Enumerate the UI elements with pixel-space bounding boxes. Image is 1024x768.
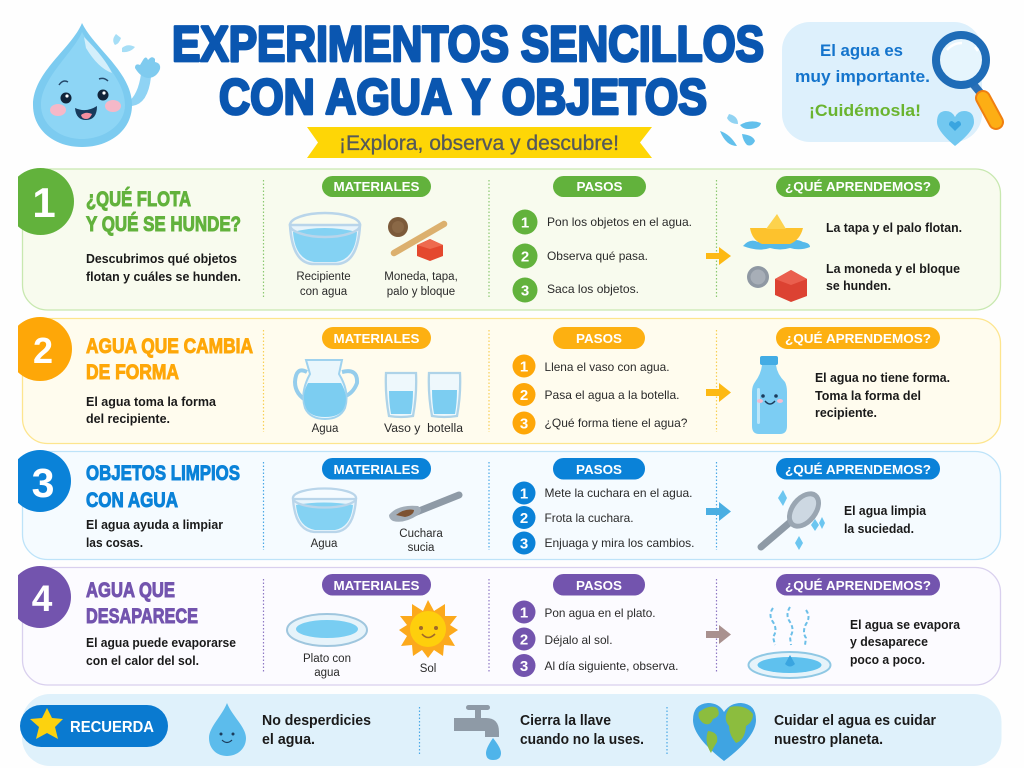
panel 4 steps: 3	[520, 658, 528, 675]
icon: blue heart	[937, 111, 974, 146]
icon: plate with water	[287, 614, 367, 646]
panel 2 steps: ¿Qué forma tiene el agua?	[544, 416, 688, 430]
panel 4 pasos pill: PASOS	[576, 578, 622, 593]
panel 1 description: Descubrimos qué objetos	[86, 251, 237, 266]
panel 1 result text: La moneda y el bloque	[826, 261, 960, 276]
callout: el agua es importante	[782, 22, 982, 142]
panel 1 description	[86, 251, 241, 284]
material labels: Agua	[312, 423, 339, 435]
recuerda badge: RECUERDA	[70, 719, 154, 736]
icon: bowl with water	[290, 213, 360, 264]
recuerda badge	[20, 705, 168, 747]
panel 3 background	[22, 452, 1000, 560]
panel 2 result text: recipiente.	[815, 405, 877, 420]
icon: sinking coin and block	[747, 266, 807, 302]
panel 1: qué flota	[7, 168, 1000, 310]
panel 4 result text: poco a poco.	[850, 652, 925, 667]
panel 1 aprendemos pill	[776, 176, 940, 197]
panel 4 description: con el calor del sol.	[86, 653, 199, 668]
material labels: Recipiente	[296, 271, 351, 283]
panel 2 description: El agua toma la forma	[86, 394, 217, 409]
panel 3 aprendemos pill	[776, 458, 940, 480]
panel: recuerda	[20, 694, 1002, 766]
material labels	[296, 271, 458, 298]
panel 4 number badge: 4	[32, 578, 53, 619]
panel 3 steps: 2	[520, 510, 528, 527]
material labels: agua	[314, 667, 340, 679]
material labels: sucia	[408, 542, 435, 554]
panel 2 result text	[815, 370, 950, 420]
panel 2 materiales pill: MATERIALES	[334, 331, 420, 346]
panel 3 result text: El agua limpia	[844, 503, 927, 518]
panel 2 arrow	[706, 383, 731, 402]
icon: glass bowl	[293, 488, 356, 532]
panel 3 arrow	[706, 502, 731, 521]
panel 1 steps: Observa qué pasa.	[547, 249, 648, 263]
mascot: waving water drop	[33, 23, 160, 147]
material labels: Vaso y botella	[384, 423, 464, 435]
panel 2 number badge	[18, 317, 72, 381]
material labels: Cuchara	[399, 528, 443, 540]
material labels	[303, 653, 436, 679]
panel 4 pasos pill	[553, 574, 645, 596]
panel 3 heading: CON AGUA	[86, 488, 178, 512]
panel 4 aprendemos pill	[776, 574, 940, 596]
panel 3 steps	[512, 482, 694, 554]
panel 4 materiales pill: MATERIALES	[334, 578, 420, 593]
panel 1 background	[22, 169, 1000, 310]
material labels: Moneda, tapa,	[384, 271, 458, 283]
panel 2 result text: El agua no tiene forma.	[815, 370, 950, 385]
panel 4: agua que desaparece	[9, 566, 1000, 685]
panel 2 pasos pill	[553, 327, 645, 349]
panel 4 steps: Al día siguiente, observa.	[544, 659, 678, 673]
panel 1 steps: 2	[521, 248, 529, 266]
panel 2 steps: Llena el vaso con agua.	[544, 360, 670, 374]
panel 1 materiales pill	[322, 176, 431, 197]
panel 2 aprendemos pill	[776, 327, 940, 349]
panel 1 pasos pill: PASOS	[576, 179, 623, 194]
panel 4 heading	[86, 578, 198, 628]
material labels	[311, 528, 443, 554]
panel 1 result text: La tapa y el palo flotan.	[826, 220, 962, 235]
icon: evaporating plate	[748, 607, 830, 678]
panel 3 steps: Mete la cuchara en el agua.	[544, 486, 692, 500]
icon: smiling sun	[399, 600, 458, 658]
panel 3 description: El agua ayuda a limpiar	[86, 517, 223, 532]
panel 2 heading: DE FORMA	[86, 360, 179, 384]
callout: el agua es importante: muy importante.	[795, 67, 930, 86]
panel 4 result text: y desaparece	[850, 634, 928, 649]
panel 4 steps: Pon agua en el plato.	[544, 606, 656, 620]
recuerda text 3: nuestro planeta.	[774, 732, 883, 748]
panel 4 result text: El agua se evapora	[850, 617, 961, 632]
material labels: Plato con	[303, 653, 351, 665]
icon: smiling bottle	[752, 356, 787, 434]
panel 3 heading: OBJETOS LIMPIOS	[86, 461, 240, 485]
material labels: palo y bloque	[387, 286, 455, 298]
panel 1 pasos pill	[553, 176, 646, 197]
icon: coin, stick and block	[388, 217, 444, 261]
panel 4 materiales pill	[322, 574, 431, 596]
title: CON AGUA Y OBJETOS	[219, 69, 707, 125]
recuerda text 3: Cuidar el agua es cuidar	[774, 713, 936, 729]
icon: magnifying glass	[936, 35, 996, 122]
panel 2 heading	[86, 334, 253, 384]
icon: faucet and drop	[454, 705, 501, 760]
panel 1 materiales pill: MATERIALES	[334, 179, 420, 194]
panel 3 aprendemos pill: ¿QUÉ APRENDEMOS?	[785, 462, 931, 477]
callout: el agua es importante: ¡Cuidémosla!	[809, 101, 921, 120]
panel 3 heading	[86, 461, 240, 512]
recuerda text 1	[262, 713, 371, 748]
icon: paper boat	[743, 214, 810, 250]
panel 2 pasos pill: PASOS	[576, 331, 622, 346]
title	[172, 16, 764, 125]
panel 1 heading	[86, 186, 241, 236]
panel 3 materiales pill: MATERIALES	[334, 462, 420, 477]
recuerda background	[22, 694, 1002, 766]
icon: two glasses	[386, 373, 460, 417]
panel 2 description	[86, 394, 217, 426]
recuerda text 2: Cierra la llave	[520, 713, 611, 729]
panel 3: objetos limpios con agua	[9, 450, 1000, 560]
panel 3 result text: la suciedad.	[844, 521, 914, 536]
panel 2 steps: Pasa el agua a la botella.	[544, 388, 680, 402]
panel 3 steps: 1	[520, 486, 528, 502]
subtitle ribbon	[307, 127, 652, 158]
panel 3 description: las cosas.	[86, 535, 143, 550]
panel 1 steps: Pon los objetos en el agua.	[547, 215, 692, 229]
recuerda text 1: No desperdicies	[262, 713, 371, 729]
panel 4 result text	[850, 617, 961, 667]
panel 2: agua que cambia de forma	[8, 317, 1000, 444]
panel 1 number badge	[18, 168, 74, 235]
panel 4 description: El agua puede evaporarse	[86, 635, 236, 650]
subtitle ribbon: ¡Explora, observa y descubre!	[339, 132, 619, 155]
panel 3 pasos pill	[553, 458, 645, 480]
panel 2 steps	[512, 354, 688, 434]
panel 4 heading: AGUA QUE	[86, 578, 175, 602]
icon: smiling drop	[209, 703, 246, 756]
panel 4 steps: 2	[520, 632, 528, 648]
panel 1 description: flotan y cuáles se hunden.	[86, 269, 241, 284]
recuerda text 3	[774, 713, 936, 748]
panel 2 number badge: 2	[33, 330, 53, 371]
recuerda text 2: cuando no la uses.	[520, 732, 644, 748]
material labels: Agua	[311, 538, 338, 550]
panel 1 steps: 3	[521, 282, 529, 300]
icon: earth heart	[693, 703, 756, 761]
recuerda text 2	[520, 713, 644, 748]
panel 1 arrow	[706, 247, 731, 265]
panel 1 steps: Saca los objetos.	[547, 282, 639, 296]
panel 1 steps: 1	[521, 214, 529, 232]
panel 2 description: del recipiente.	[86, 411, 170, 426]
panel 2 aprendemos pill: ¿QUÉ APRENDEMOS?	[785, 331, 931, 346]
panel 3 steps: Enjuaga y mira los cambios.	[544, 536, 694, 550]
panel 3 materiales pill	[322, 458, 431, 480]
panel 4 arrow	[706, 625, 731, 644]
callout: el agua es importante: El agua es	[820, 41, 903, 60]
panel 4 steps: Déjalo al sol.	[544, 633, 612, 647]
panel 2 steps: 2	[520, 387, 528, 404]
panel 2 steps: 1	[520, 358, 528, 376]
panel 2 result text: Toma la forma del	[815, 388, 921, 403]
panel 2 steps: 3	[520, 416, 528, 432]
panel 1 heading: ¿QUÉ FLOTA	[86, 186, 191, 211]
panel 3 pasos pill: PASOS	[576, 462, 622, 477]
icon: clean spoon with sparkles	[761, 485, 828, 550]
icon: dirty spoon	[389, 495, 459, 522]
icon: water jug	[295, 360, 357, 419]
panel 4 heading: DESAPARECE	[86, 604, 198, 628]
panel 3 number badge	[18, 450, 71, 512]
panel 3 steps: 3	[520, 536, 528, 552]
panel 2 heading: AGUA QUE CAMBIA	[86, 334, 253, 358]
panel 3 description	[86, 517, 223, 550]
icon: water splash	[720, 114, 761, 146]
panel 3 number badge: 3	[32, 460, 54, 506]
panel 4 background	[22, 568, 1000, 685]
panel 2 background	[22, 318, 1000, 444]
panel 1 heading: Y QUÉ SE HUNDE?	[86, 211, 241, 236]
panel 1 result text: se hunden.	[826, 278, 891, 293]
panel 1 steps	[512, 210, 692, 302]
material labels: con agua	[300, 286, 348, 298]
recuerda text 1: el agua.	[262, 732, 315, 748]
panel 4 steps	[512, 600, 678, 677]
material labels: Sol	[420, 663, 436, 675]
panel 4 steps: 1	[520, 604, 528, 622]
panel 1 number badge: 1	[32, 179, 56, 226]
panel 4 aprendemos pill: ¿QUÉ APRENDEMOS?	[785, 578, 931, 593]
panel 3 steps: Frota la cuchara.	[544, 511, 634, 525]
panel 1 result text	[826, 220, 962, 293]
title: EXPERIMENTOS SENCILLOS	[172, 16, 764, 72]
panel 1 aprendemos pill: ¿QUÉ APRENDEMOS?	[785, 179, 931, 194]
panel 2 materiales pill	[322, 327, 431, 349]
panel 4 description	[86, 635, 236, 668]
material labels	[312, 423, 464, 435]
panel 4 number badge	[18, 566, 71, 628]
panel 3 result text	[844, 503, 927, 536]
